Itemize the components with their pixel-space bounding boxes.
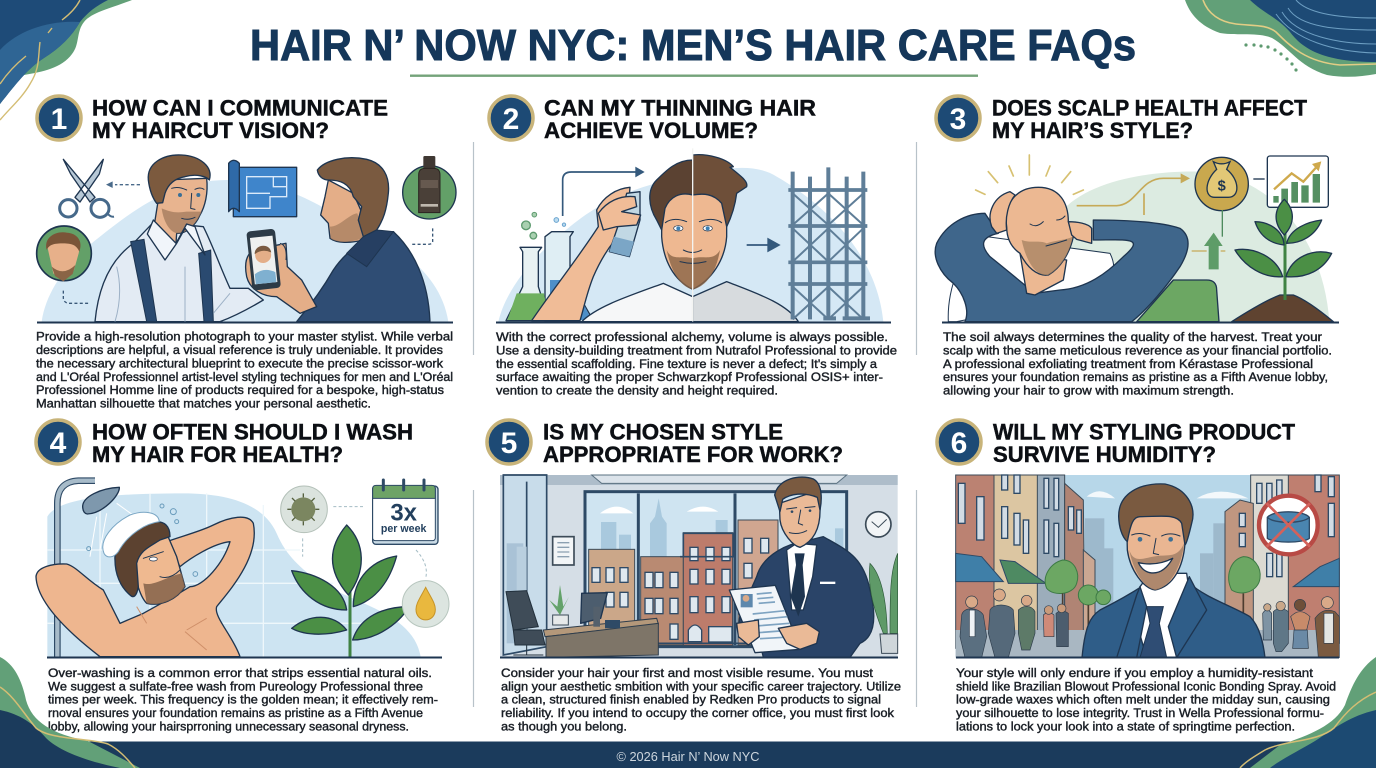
icon: no wax sign [1259, 496, 1318, 554]
floor line [500, 656, 898, 658]
icon: microbe [281, 486, 327, 533]
answer text 3: allowing your hair to grow with maximum strength. [943, 384, 1234, 398]
window left [503, 475, 547, 655]
figure: stylist in shirt and suspenders [95, 155, 263, 322]
heading 3: DOES SCALP HEALTH AFFECT [992, 96, 1307, 120]
panel 6: humidity [937, 420, 1339, 733]
answer text 6: shield like Brazilian Blowout Professional Iconic Bonding Spray. Avoid [956, 679, 1336, 693]
figure: man relaxing with hands behind head [935, 187, 1188, 322]
figure: client seen from behind [297, 158, 430, 322]
floor line [37, 322, 453, 324]
answer text 2: With the correct professional alchemy, volume is always possible. [496, 330, 888, 344]
arrow: dashed to scissors [106, 181, 140, 188]
icon: oil drop [402, 581, 449, 627]
answer text 6: low-grade waxes which often melt under the midday sun, causing [956, 693, 1330, 707]
illustration: corner office [500, 475, 898, 658]
skyline [601, 498, 843, 557]
heading 5: APPROPRIATE FOR WORK? [543, 442, 843, 467]
desk with monitor and plant [543, 585, 658, 657]
awnings [956, 553, 1339, 587]
footer text: © 2026 Hair N’ Now NYC [616, 749, 760, 764]
icon: scaffold [788, 167, 870, 319]
distant towers [1085, 518, 1230, 645]
figure: smiling man in suit [1082, 484, 1265, 658]
answer text 5: align your aesthetic smbition with your specific career trajectory. Utilize [501, 679, 901, 693]
buildings left [956, 475, 1095, 648]
answer text 3: A professional exfoliating treatment from Kérastase Professional [943, 357, 1313, 371]
heading 4: HOW OFTEN SHOULD I WASH [92, 420, 413, 444]
buildings [589, 520, 778, 645]
chart: growth bars [1267, 156, 1328, 207]
answer text 1 [36, 330, 453, 410]
title rule [410, 74, 978, 77]
icon: calendar 3x per week: per week [381, 523, 427, 535]
heading 5: IS MY CHOSEN STYLE [543, 420, 783, 444]
potted plant [869, 553, 898, 653]
number badge 3 [936, 96, 980, 140]
number badge 1: 1 [51, 103, 67, 136]
arrow: gold curve [1077, 173, 1190, 215]
panel 5: work appropriate [487, 420, 901, 733]
icon: bubbles [87, 504, 198, 576]
heading 1: MY HAIRCUT VISION? [92, 118, 329, 143]
panel 1: communicate haircut vision [36, 96, 456, 410]
answer text 2: Use a density-building treatment from Nutrafol Professional to provide [496, 344, 897, 358]
panel dividers [474, 142, 916, 707]
answer text 1: descriptions are helpful, a visual reference is truly undeniable. It provides [36, 343, 443, 357]
number badge 6 [937, 420, 981, 464]
number badge 6: 6 [951, 427, 967, 460]
icon: calendar 3x per week [373, 480, 438, 544]
answer text 4: Over-washing is a common error that strips essential natural oils. [48, 666, 432, 680]
heading 6: SURVIVE HUMIDITY? [993, 442, 1216, 467]
floor line [942, 322, 1339, 324]
answer text 3: The soil always determines the quality of the harvest. Treat your [943, 330, 1322, 344]
answer text 1: the necessary architectural blueprint to execute the precise scissor-work [36, 356, 444, 370]
answer text 3 [943, 330, 1332, 398]
footer bar [0, 742, 1376, 768]
title: HAIR N’ NOW NYC: MEN’S HAIR CARE FAQs [250, 21, 1136, 70]
icon: money coin [1195, 157, 1248, 211]
answer text 4: lobby, allowing your hairsprroning unnecessary seasonal dryness. [48, 719, 409, 733]
corner decoration: bottom right wave [1240, 657, 1376, 768]
answer text 2: vention to create the density and height required. [496, 384, 778, 398]
answer text 5: Consider your hair your first and most visible resume. You must [501, 666, 874, 680]
office chair [506, 591, 545, 655]
number badge 2 [489, 96, 533, 140]
answer text 2 [496, 330, 897, 398]
icon: product bottle [403, 156, 456, 219]
answer text 4: We suggest a sulfate-free wash from Pureology Professional three [48, 679, 423, 693]
icon: money coin: $ [1218, 179, 1226, 195]
corner decoration: top left wave [0, 0, 132, 120]
illustration: rainy street [956, 475, 1339, 658]
answer text 3: scalp with the same meticulous reverence as your financial portfolio. [943, 344, 1332, 358]
icon: calendar 3x per week: 3x [390, 499, 418, 526]
wall clock [866, 512, 891, 537]
figure: man in suit with resume [729, 477, 874, 657]
answer text 2: the essential scaffolding. Fine texture is never a defect; It's simply a [496, 357, 877, 371]
floor line [47, 656, 442, 658]
answer text 4: times per week. This frequency is the golden mean; it effectively rem- [48, 693, 438, 707]
answer text 6 [956, 666, 1336, 733]
figure: arm with spray bottle [532, 187, 641, 321]
panel 3: scalp health [935, 96, 1339, 398]
icon: plant [292, 525, 409, 657]
illustration: density treatment [498, 148, 883, 322]
answer text 3: ensures your foundation remains as pristine as a Fifth Avenue lobby, [943, 370, 1328, 384]
illustration: man in shower [36, 480, 449, 657]
heading 1: HOW CAN I COMMUNICATE [92, 96, 388, 120]
figure: man washing hair [36, 512, 254, 657]
number badge 1 [37, 96, 81, 140]
icon: flasks [506, 212, 594, 322]
icon: shower [57, 481, 140, 657]
corner decoration: top right wave [1185, 0, 1376, 77]
answer text 5: as though you belong. [501, 719, 627, 733]
heading 2: ACHIEVE VOLUME? [544, 118, 758, 143]
icon: sprout in soil [1232, 199, 1333, 322]
icon: rays [976, 155, 1083, 194]
floor line [496, 322, 891, 324]
answer text 1: Professionel Homme line of products required for a bespoke, high-status [36, 383, 444, 397]
arrow: flask to head [563, 167, 645, 216]
number badge 4 [36, 420, 80, 464]
heading 2 [544, 96, 816, 143]
answer text 1: Manhattan silhouette that matches your personal aesthetic. [36, 396, 371, 410]
floor line [956, 656, 1339, 658]
heading 6: WILL MY STYLING PRODUCT [993, 420, 1295, 444]
answer text 2: surface awaiting the proper Schwarzkopf Professional OSIS+ inter- [496, 370, 883, 384]
heading 1 [92, 96, 388, 143]
illustration: relaxed man with plant [935, 155, 1333, 322]
number badge 5: 5 [501, 427, 517, 460]
heading 3 [992, 96, 1307, 143]
framed certificate [553, 537, 574, 565]
answer text 5 [501, 666, 901, 733]
sidewalk [956, 630, 1339, 658]
answer text 6: your silhouette to lose integrity. Trust in Wella Professional formu- [956, 706, 1324, 720]
icon: scissors [60, 159, 114, 217]
heading 6 [993, 420, 1295, 467]
answer text 4 [48, 666, 438, 733]
illustration: consultation with stylist [37, 155, 456, 322]
number badge 5 [487, 420, 531, 464]
number badge 3: 3 [950, 103, 966, 136]
arrow: green up [1192, 233, 1225, 269]
heading 5 [543, 420, 843, 467]
trees [1045, 557, 1260, 605]
answer text 6: Your style will only endure if you employ a humidity-resistant [956, 666, 1314, 680]
corner decoration: bottom left wave [0, 657, 140, 768]
heading 4: MY HAIR FOR HEALTH? [92, 442, 343, 467]
icon: client portrait [37, 226, 91, 281]
pedestrians left [960, 589, 1068, 658]
heading 4 [92, 420, 413, 467]
pedestrians right [1263, 597, 1339, 658]
answer text 5: a clean, structured finish enabled by Redken Pro products to signal [501, 693, 881, 707]
icon: sofa cushion [1137, 280, 1219, 322]
answer text 5: reliability. If you intend to occupy the corner office, you must first look [501, 706, 895, 720]
answer text 1: Provide a high-resolution photograph to your master stylist. While verbal [36, 330, 453, 344]
panel 4: washing frequency [36, 420, 449, 733]
answer text 4: rnoval ensures your foundation remains as pristine as a Fifth Avenue [48, 706, 423, 720]
heading 3: MY HAIR’S STYLE? [992, 118, 1193, 143]
icon: blueprint [229, 160, 297, 217]
buildings right [1225, 475, 1339, 643]
panel 2: thinning hair volume [489, 96, 897, 398]
number badge 2: 2 [503, 103, 519, 136]
icon: phone in hand [246, 229, 317, 313]
heading 2: CAN MY THINNING HAIR [544, 96, 816, 120]
answer text 1: and L'Oréal Professionnel artist-level styling techniques for men and L'Oréal [36, 370, 453, 384]
number badge 4: 4 [50, 427, 67, 460]
arrow: to scaffold [747, 238, 781, 252]
answer text 6: lations to lock your look into a state of springtime perfection. [956, 719, 1295, 733]
resume sheet [729, 585, 801, 653]
figure: split face man [582, 148, 798, 322]
